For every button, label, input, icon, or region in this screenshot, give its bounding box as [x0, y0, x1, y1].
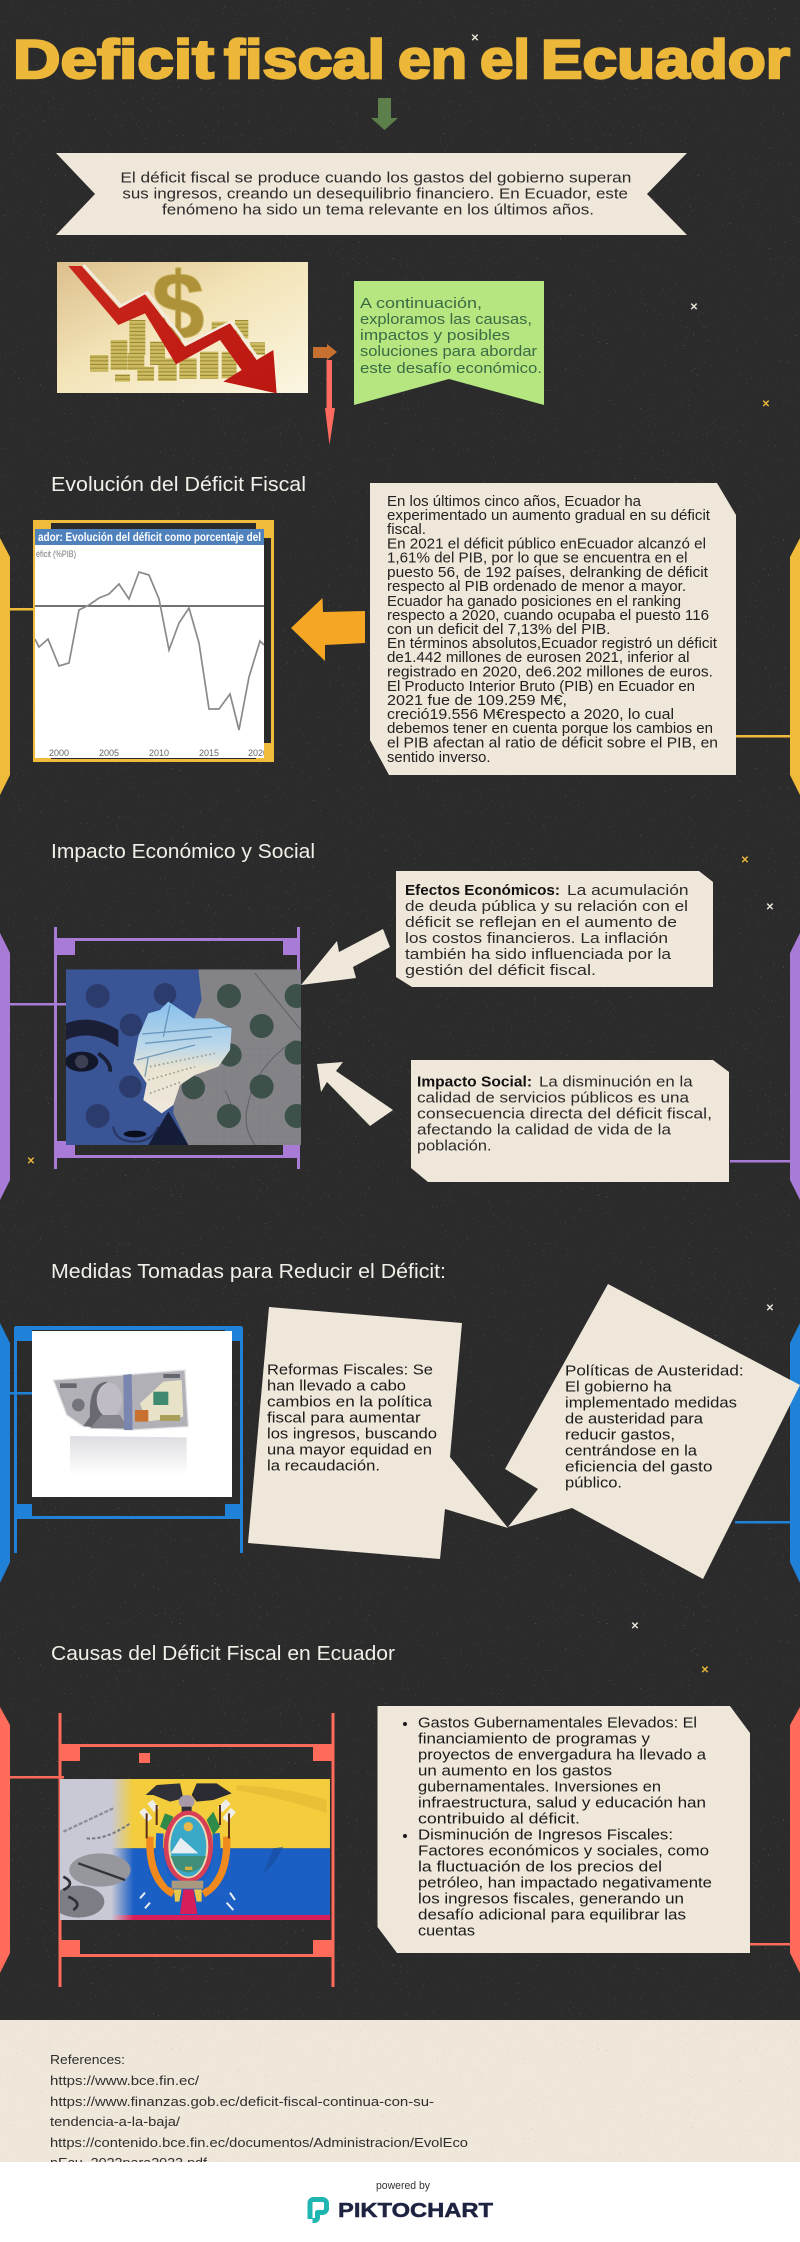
- banner text: sus ingresos, creando un desequilibrio financiero. En Ecuador, este: [122, 186, 628, 203]
- panel text: puesto 56, de 192 países, delranking de déficit: [387, 565, 708, 581]
- panel text: [417, 1074, 712, 1155]
- footer: Piktochart branding: powered by: [376, 2180, 430, 2192]
- bullet list: infraestructura, salud y educación han: [418, 1794, 706, 1811]
- bullet list: la fluctuación de los precios del: [418, 1858, 662, 1875]
- callout: green ribbon: [354, 281, 544, 405]
- panel: impacto social: [411, 1060, 729, 1182]
- bullet list: petróleo, han impactado negativamente: [418, 1874, 712, 1891]
- panel text: de1.442 millones de eurosen 2021, inferior al: [387, 650, 690, 666]
- speech bubble: reformas fiscales: [248, 1307, 508, 1559]
- title: el: [480, 28, 530, 90]
- decorative stars: ✕: [701, 1665, 709, 1676]
- panel text: creció19.556 M€respecto a 2020, lo cual: [387, 707, 674, 723]
- panel text: Ecuador ha ganado posiciones en el ranking: [387, 594, 681, 610]
- image: falling red arrow with coins and dollar sign: [57, 253, 308, 393]
- bubble text: reducir gastos,: [565, 1426, 675, 1443]
- decorative stars: ✕: [690, 302, 698, 313]
- side bars: blue: [0, 1323, 800, 1583]
- panel text: déficit se reflejan en el aumento de: [405, 914, 677, 931]
- image: dollar bill: [32, 1331, 232, 1497]
- bullet list: desafío adicional para equilibrar las: [418, 1906, 686, 1923]
- panel text: respecto al PIB ordenado de menor a mayor.: [387, 579, 686, 595]
- callout text: impactos y posibles: [360, 327, 510, 344]
- line chart: deficit as percent of GDP: 2010: [149, 748, 169, 758]
- title: Deficit: [13, 28, 214, 90]
- banner: introduction: [56, 153, 687, 235]
- title: [13, 28, 790, 90]
- panel text: de deuda pública y su relación con el: [405, 898, 688, 915]
- title: Ecuador: [541, 28, 790, 90]
- title: fiscal: [224, 28, 385, 90]
- bubble text: [565, 1362, 744, 1491]
- references text: References:: [50, 2052, 125, 2067]
- panel text: La disminución en la: [539, 1074, 693, 1091]
- image: Ecuador flag with coat of arms: [52, 1779, 330, 1920]
- bullet list: los ingresos fiscales, generando un: [418, 1890, 684, 1907]
- panel text: debemos tener en cuenta porque los cambios en: [387, 721, 713, 737]
- panel text: [387, 494, 718, 766]
- bullet list: Factores económicos y sociales, como: [418, 1842, 709, 1859]
- decorative stars: ✕: [27, 1156, 35, 1167]
- bubble text: cambios en la política: [267, 1393, 433, 1410]
- panel text: Impacto Social:: [417, 1074, 532, 1091]
- panel text: 2021 fue de 109.259 M€,: [387, 693, 567, 709]
- bubble text: [267, 1361, 437, 1474]
- icon: green down arrow: [371, 98, 398, 130]
- side bars: coral: [0, 1707, 800, 1973]
- panel text: consecuencia directa del déficit fiscal,: [417, 1106, 712, 1123]
- decorative stars: ✕: [471, 33, 479, 44]
- line chart: deficit as percent of GDP: [35, 529, 268, 758]
- panel text: La acumulación: [567, 882, 688, 899]
- panel text: población.: [417, 1138, 492, 1155]
- callout text: exploramos las causas,: [360, 311, 532, 328]
- panel: evolucion text: [370, 483, 736, 775]
- bullet list: Disminución de Ingresos Fiscales:: [418, 1826, 673, 1843]
- image frame: coral: [58, 1713, 334, 1987]
- decorative stars: ✕: [766, 902, 774, 913]
- side bars: yellow: [0, 538, 800, 795]
- side bars: purple: [0, 933, 800, 1200]
- heading: medidas: Medidas Tomadas para Reducir el Déficit:: [51, 1261, 446, 1283]
- references text: nEcu_2022para2023.pdf: [50, 2155, 207, 2170]
- bubble text: El gobierno ha: [565, 1378, 672, 1395]
- references text: https://contenido.bce.fin.ec/documentos/Administracion/EvolEco: [50, 2135, 468, 2150]
- decorative stars: [27, 33, 774, 1676]
- banner text: El déficit fiscal se produce cuando los gastos del gobierno superan: [120, 170, 631, 187]
- icon: small orange arrow: [313, 344, 337, 360]
- image frame: blue: [14, 1326, 243, 1553]
- bullet list: [403, 1714, 712, 1939]
- title: en: [398, 28, 467, 90]
- bubble text: de austeridad para: [565, 1410, 704, 1427]
- bullet list: contribuido al déficit.: [418, 1810, 580, 1827]
- speech bubble: politicas de austeridad: [505, 1284, 800, 1579]
- panel text: El Producto Interior Bruto (PIB) en Ecuador en: [387, 679, 695, 695]
- image: banknote collage with South America map: [65, 969, 309, 1145]
- bubble text: implementado medidas: [565, 1394, 737, 1411]
- arrow: cream pointing to image from economic panel: [301, 929, 390, 985]
- bubble text: han llevado a cabo: [267, 1377, 406, 1394]
- panel: causas text: [378, 1706, 750, 1953]
- callout text: este desafío económico.: [360, 360, 542, 377]
- heading: causas: Causas del Déficit Fiscal en Ecuador: [51, 1643, 395, 1665]
- bubble text: Reformas Fiscales: Se: [267, 1361, 433, 1378]
- references text: tendencia-a-la-baja/: [50, 2114, 180, 2129]
- decorative stars: ✕: [741, 855, 749, 866]
- references text: https://www.finanzas.gob.ec/deficit-fiscal-continua-con-su-: [50, 2094, 434, 2109]
- arrow: big orange left: [291, 598, 365, 661]
- panel text: fiscal.: [387, 522, 426, 538]
- line chart: deficit as percent of GDP: éficit (%PIB): [36, 549, 76, 560]
- bullet list: proyectos de envergadura ha llevado a: [418, 1746, 707, 1763]
- bubble text: público.: [565, 1474, 622, 1491]
- bullet list: gubernamentales. Inversiones en: [418, 1778, 661, 1795]
- panel text: los costos financieros. La inflación: [405, 930, 668, 947]
- heading: evolucion: Evolución del Déficit Fiscal: [51, 474, 306, 496]
- icon: Piktochart logo mark: [310, 2200, 326, 2220]
- heading: impacto: Impacto Económico y Social: [51, 841, 315, 863]
- bullet list: Gastos Gubernamentales Elevados: El: [418, 1714, 697, 1731]
- decorative stars: ✕: [631, 1621, 639, 1632]
- panel text: En términos absolutos,Ecuador registró un déficit: [387, 636, 717, 652]
- bubble text: Políticas de Austeridad:: [565, 1362, 744, 1379]
- bubble text: centrándose en la: [565, 1442, 698, 1459]
- line chart: deficit as percent of GDP: 2015: [199, 748, 219, 758]
- panel text: registrado en 2020, de6.202 millones de euros.: [387, 665, 713, 681]
- bubble text: eficiencia del gasto: [565, 1458, 712, 1475]
- callout text: soluciones para abordar: [360, 343, 537, 360]
- bubble text: la recaudación.: [267, 1457, 380, 1474]
- references text: https://www.bce.fin.ec/: [50, 2073, 199, 2088]
- icon: red down arrow: [325, 360, 335, 445]
- panel text: Efectos Económicos:: [405, 882, 560, 899]
- panel text: En los últimos cinco años, Ecuador ha: [387, 494, 642, 510]
- panel text: calidad de servicios públicos es una: [417, 1090, 690, 1107]
- panel text: gestión del déficit fiscal.: [405, 962, 596, 979]
- bubble text: los ingresos, buscando: [267, 1425, 437, 1442]
- bullet list: un aumento en los gastos: [418, 1762, 612, 1779]
- panel text: [405, 882, 688, 979]
- panel text: afectando la calidad de vida de la: [417, 1122, 672, 1139]
- panel text: 1,61% del PIB, por lo que se encuentra en el: [387, 551, 688, 567]
- bullet list: financiamiento de programas y: [418, 1730, 651, 1747]
- panel text: también ha sido influenciada por la: [405, 946, 672, 963]
- arrow: cream pointing to image from social panel: [317, 1062, 393, 1126]
- panel text: con un deficit del 7,13% del PIB.: [387, 622, 610, 638]
- image: falling red arrow with coins and dollar sign: $: [151, 253, 205, 360]
- panel: efectos economicos: [396, 871, 713, 987]
- line chart: deficit as percent of GDP: 2020: [248, 748, 268, 758]
- panel text: experimentado un aumento gradual en su déficit: [387, 508, 710, 524]
- line chart: deficit as percent of GDP: ador: Evolución del déficit como porcentaje del: [38, 532, 261, 544]
- banner text: fenómeno ha sido un tema relevante en los últimos años.: [162, 202, 594, 219]
- footer: references: [0, 2020, 800, 2170]
- decorative stars: ✕: [762, 399, 770, 410]
- panel text: En 2021 el déficit público enEcuador alcanzó el: [387, 537, 706, 553]
- panel text: sentido inverso.: [387, 750, 490, 766]
- bullet list: cuentas: [418, 1922, 475, 1939]
- panel text: respecto a 2020, cuando ocupaba el puesto 116: [387, 608, 709, 624]
- footer: Piktochart branding: PIKTOCHART: [338, 2199, 494, 2222]
- bubble text: una mayor equidad en: [267, 1441, 432, 1458]
- bubble text: fiscal para aumentar: [267, 1409, 421, 1426]
- line chart: deficit as percent of GDP: 2000: [49, 748, 69, 758]
- panel text: el PIB afectan al ratio de déficit sobre el PIB, en: [387, 736, 718, 752]
- image frame: purple: [54, 927, 300, 1169]
- references text: [50, 2052, 468, 2170]
- callout text: A continuación,: [360, 295, 482, 312]
- chart frame: [33, 520, 274, 762]
- line chart: deficit as percent of GDP: 2005: [99, 748, 119, 758]
- callout text: [360, 295, 542, 377]
- decorative stars: ✕: [766, 1303, 774, 1314]
- banner text: [120, 170, 631, 219]
- footer: Piktochart branding: [0, 2162, 800, 2242]
